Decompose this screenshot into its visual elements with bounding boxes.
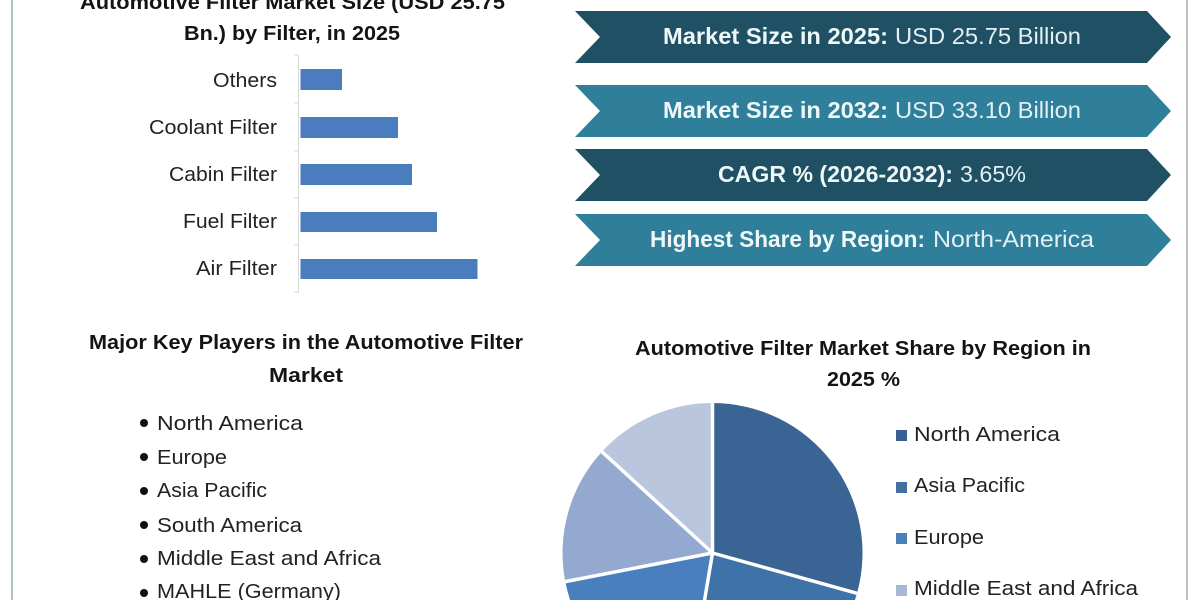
heading: filter chart title	[80, 0, 505, 45]
heading: pie chart title: 2025 %	[827, 369, 900, 391]
heading: key players title	[89, 332, 523, 387]
banner: market size 2025	[575, 11, 1171, 63]
list: key players: North America	[157, 412, 304, 435]
banner: CAGR: CAGR % (2026-2032):	[718, 161, 953, 187]
heading: key players title: Market	[269, 365, 343, 387]
banner: market size 2032: Market Size in 2032:	[663, 97, 888, 123]
banner: highest share by region	[575, 214, 1171, 266]
bar chart: category labels: Cabin Filter	[169, 163, 277, 186]
heading: filter chart title: Bn.) by Filter, in 2025	[184, 23, 400, 45]
list: key players: Asia Pacific	[157, 479, 267, 502]
heading: pie chart title: Automotive Filter Market Share by Region in	[635, 338, 1091, 360]
banner: market size 2032: USD 33.10 Billion	[895, 97, 1081, 123]
heading: key players title: Major Key Players in the Automotive Filter	[89, 332, 523, 354]
bar chart: bars	[300, 69, 478, 279]
banner: CAGR	[575, 149, 1171, 201]
list: key players: Europe	[157, 446, 227, 469]
panel: regional share pie	[563, 338, 1139, 600]
list: key players	[140, 412, 382, 600]
banner: market size 2032	[575, 85, 1171, 137]
pie legend: North America	[914, 423, 1061, 446]
pie legend: Middle East and Africa	[914, 577, 1139, 600]
pie legend: Europe	[914, 526, 984, 549]
banner: highest share by region: North-America	[933, 226, 1094, 252]
pie legend: Asia Pacific	[914, 474, 1025, 497]
bar chart: category labels: Air Filter	[196, 257, 277, 280]
heading: pie chart title	[635, 338, 1091, 391]
bar chart axis	[294, 55, 298, 293]
bar chart: category labels	[149, 69, 277, 280]
banner: market size 2025: USD 25.75 Billion	[895, 23, 1081, 49]
bar chart: category labels: Fuel Filter	[183, 210, 277, 233]
panel: key metric banners	[575, 11, 1171, 266]
bar chart: category labels: Coolant Filter	[149, 116, 277, 139]
banner: CAGR: 3.65%	[960, 161, 1026, 187]
list: key players: South America	[157, 514, 303, 537]
bar chart: category labels: Others	[213, 69, 277, 92]
panel: filter bar chart	[80, 0, 505, 293]
pie legend	[896, 423, 1139, 600]
banner: highest share by region: Highest Share by Region:	[650, 226, 925, 252]
pie chart	[563, 403, 863, 600]
list: key players: Middle East and Africa	[157, 547, 382, 570]
panel: major key players	[89, 332, 523, 600]
banner: market size 2025: Market Size in 2025:	[663, 23, 888, 49]
